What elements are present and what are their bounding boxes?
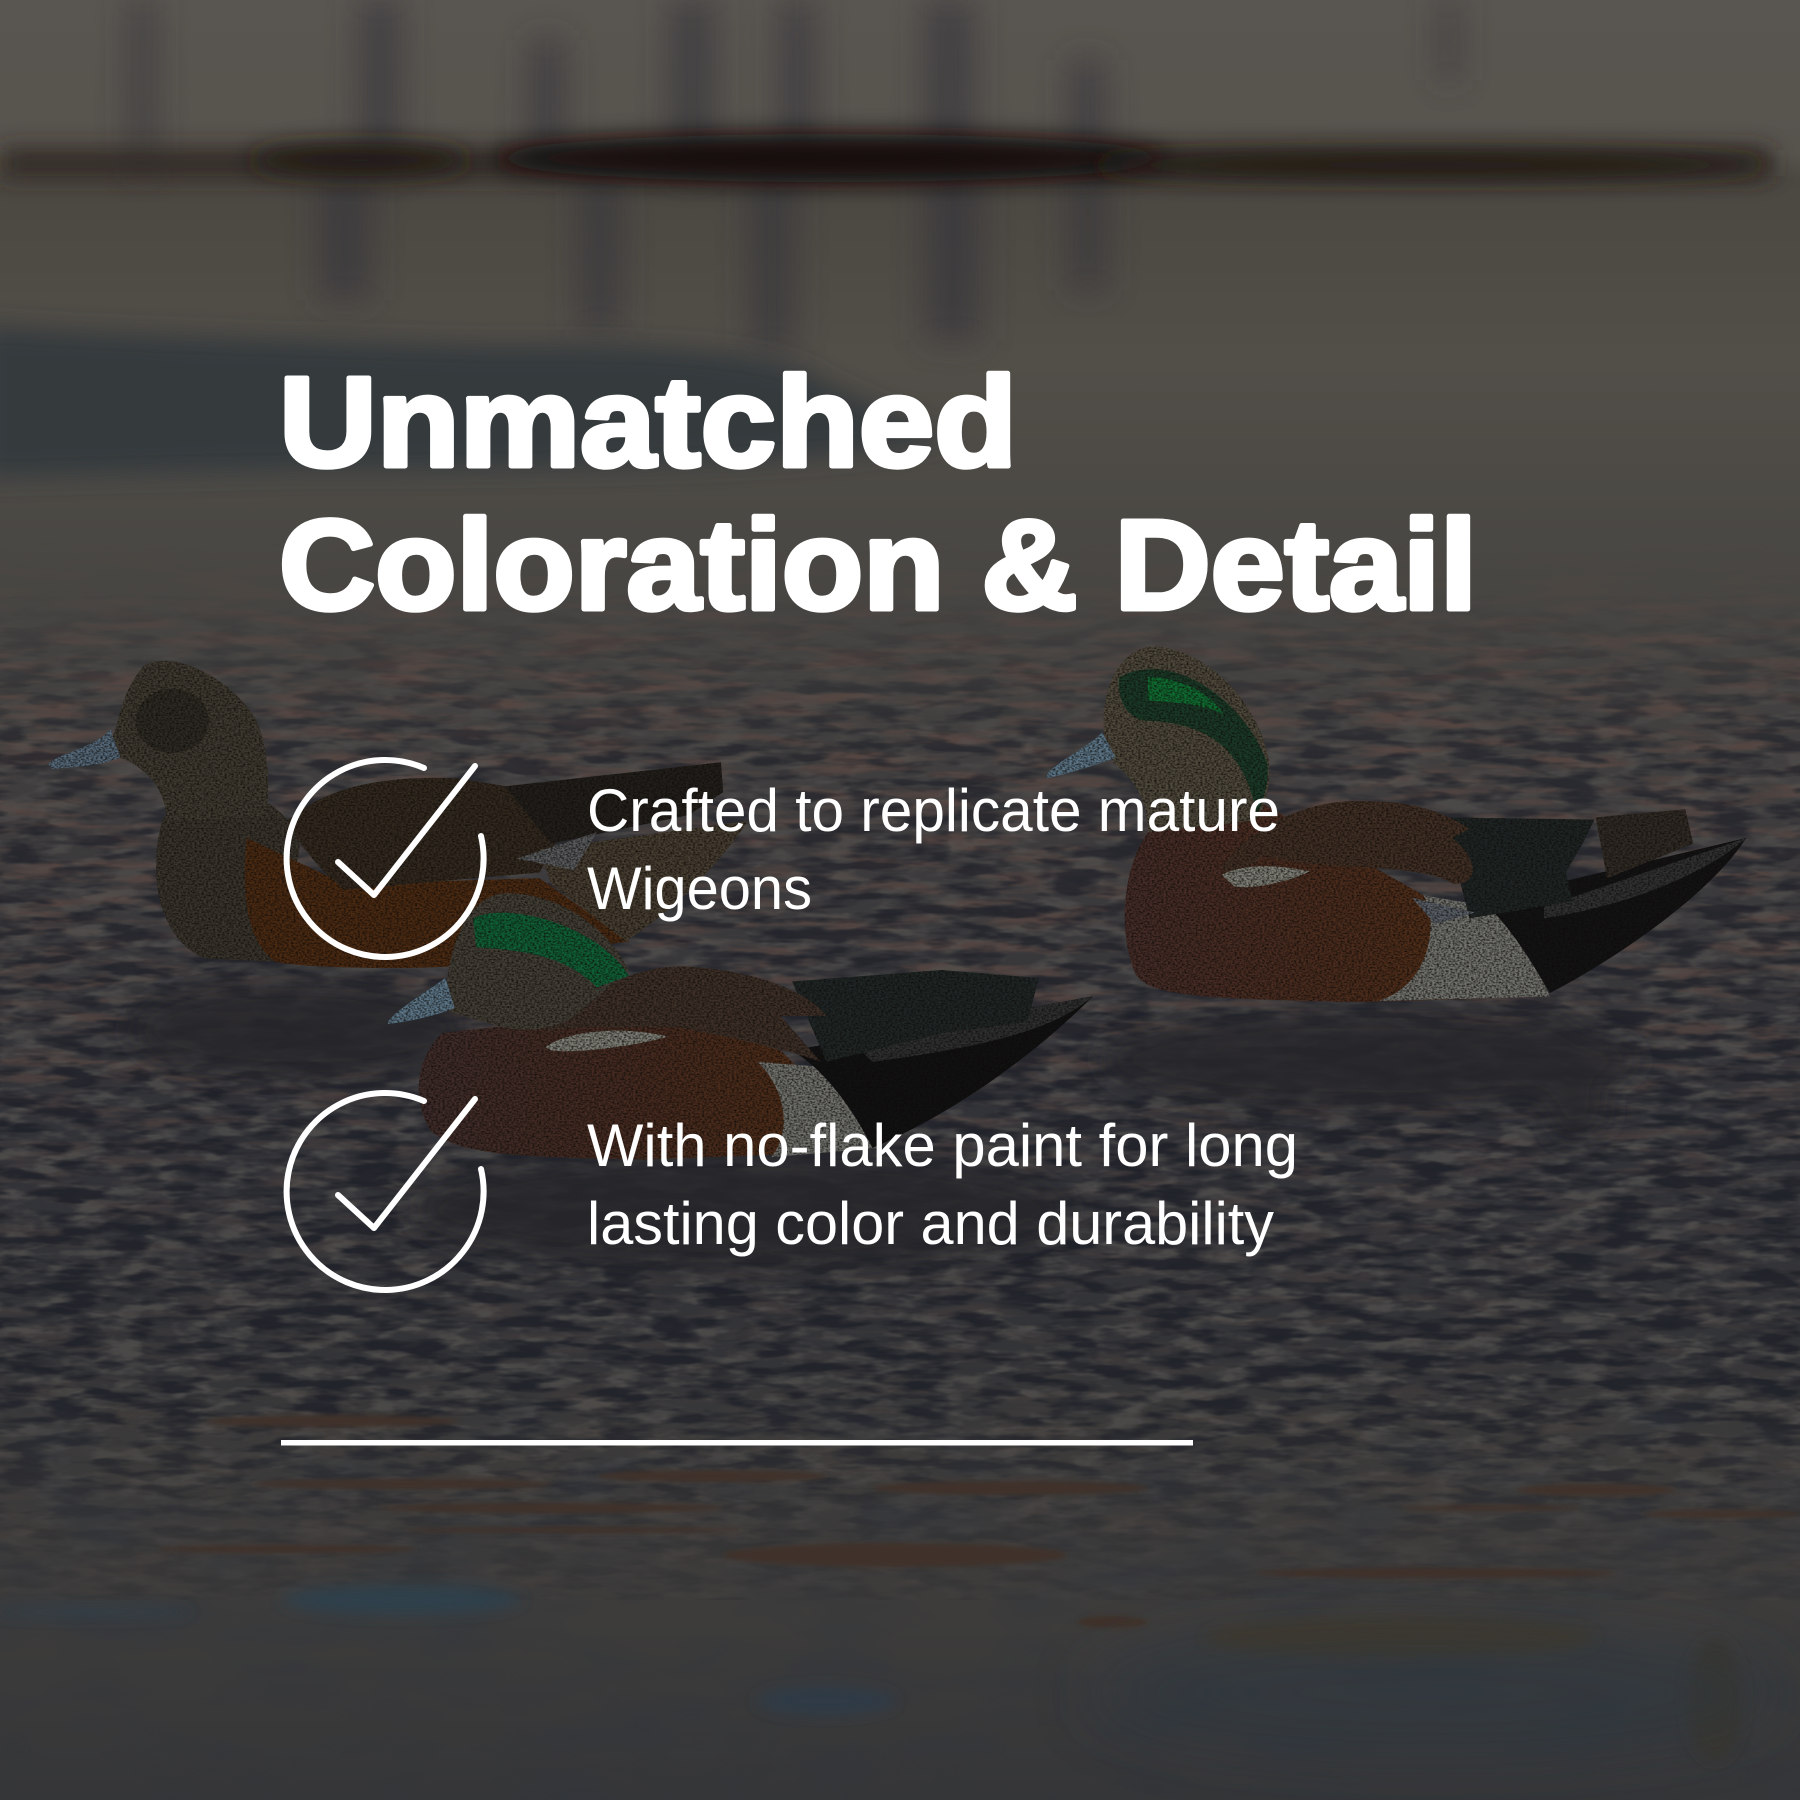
icon: check in circle, second bullet	[287, 1093, 484, 1290]
text block: second bullet: lasting color and durability	[587, 1190, 1274, 1257]
duck: drake wigeon, front	[388, 893, 1093, 1159]
decoy ducks on the water	[48, 646, 1746, 1159]
horizontal rule	[281, 1440, 1193, 1446]
text block: first bullet: Crafted to replicate mature	[587, 777, 1280, 844]
text block: second bullet	[587, 1112, 1298, 1257]
text block: first bullet: Wigeons	[587, 855, 812, 922]
icon: check in circle, first bullet	[287, 760, 484, 957]
title: Coloration & Detail	[279, 494, 1477, 637]
title: Unmatched	[279, 351, 1017, 494]
duck: female wigeon, left	[48, 661, 748, 968]
duck: drake wigeon, right	[1047, 646, 1746, 1002]
text block: first bullet	[587, 777, 1280, 922]
title	[279, 351, 1477, 637]
text block: second bullet: With no-flake paint for long	[587, 1112, 1298, 1179]
